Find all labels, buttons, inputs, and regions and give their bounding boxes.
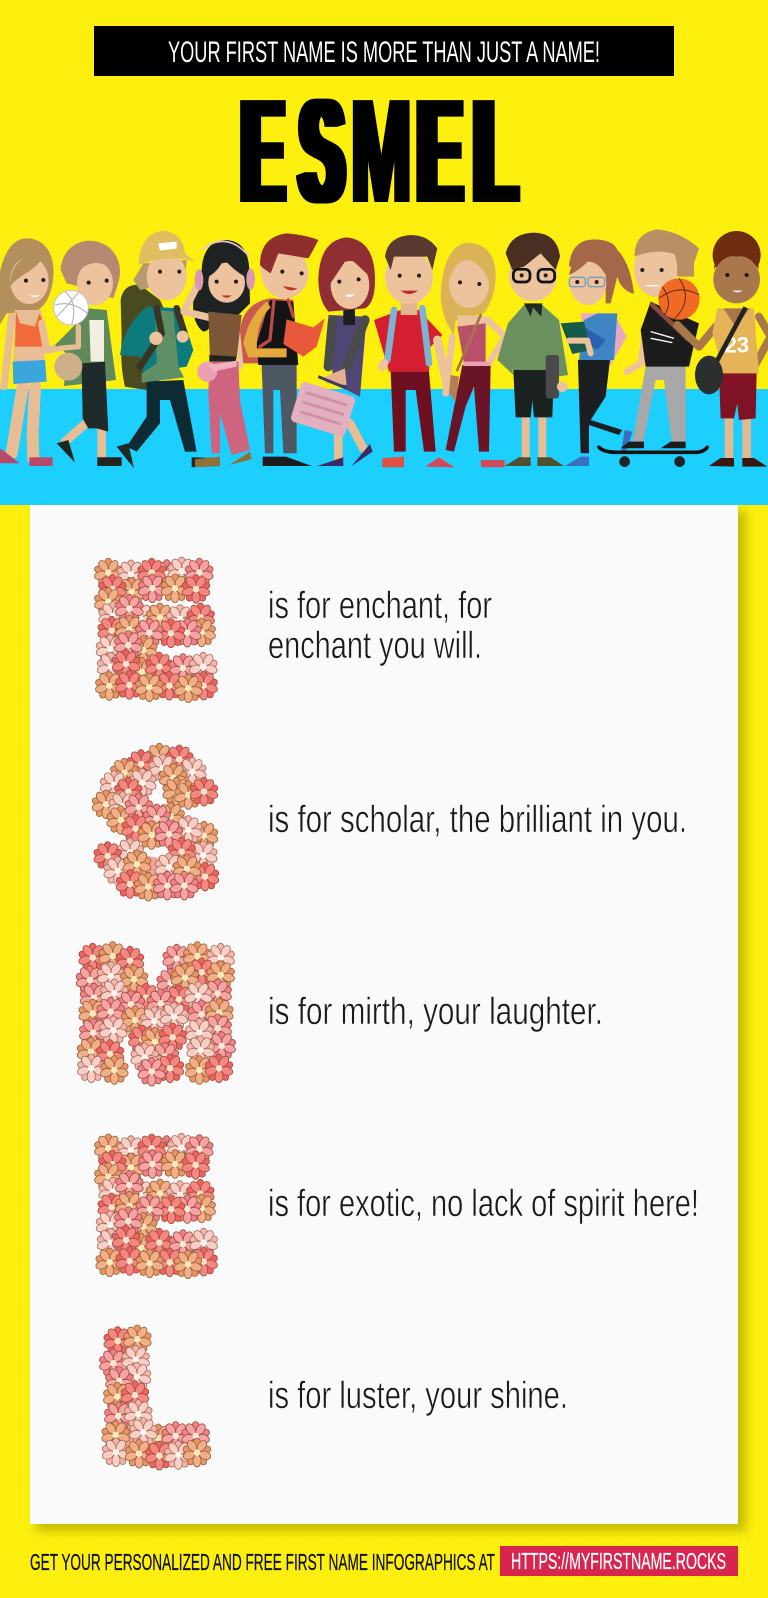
footer: call to action — [30, 1546, 738, 1576]
person: girl in orange top — [0, 238, 78, 466]
text: E line: is for enchant, for — [268, 585, 492, 627]
person: boy in yellow jersey with bag: 23 — [725, 333, 749, 358]
title: name: L — [474, 68, 516, 234]
letter L in flowers: L — [100, 1305, 200, 1491]
person: boy in red shirt with blue straps — [374, 235, 455, 467]
person: red-haired girl with pink case — [290, 237, 375, 466]
letter E in flowers: E — [102, 530, 208, 724]
person: girl in green jacket with volleyball — [54, 241, 122, 466]
letter M in flowers: M — [87, 922, 227, 1108]
person: girl with pink headphones — [184, 240, 255, 467]
panel shadow — [36, 511, 746, 1531]
letter E in flowers (second): E — [103, 1105, 210, 1299]
banner: tagline — [94, 26, 674, 76]
text: E line: enchant you will. — [268, 625, 482, 667]
illustration: group of twelve people — [0, 229, 768, 468]
letter S in flowers: S — [115, 728, 202, 907]
title: name: E — [418, 70, 461, 234]
text: M line: is for mirth, your laughter. — [268, 991, 603, 1033]
person: blonde girl with shoulder bag — [426, 243, 506, 467]
title: name — [242, 67, 516, 235]
blue floor band — [0, 389, 768, 505]
title: name: E — [242, 69, 283, 235]
panel: letters and meanings — [30, 505, 738, 1524]
person: girl with ponytail holding books — [561, 239, 634, 466]
person: boy in yellow jersey with bag — [677, 231, 768, 467]
text: L line: is for luster, your shine. — [268, 1375, 568, 1417]
person: boy with cap and large backpack — [117, 231, 220, 468]
person: boy with glasses in green sweater — [497, 233, 568, 466]
text: E line — [268, 585, 492, 667]
person: skateboarder with basketball — [599, 229, 707, 467]
title: name: S — [300, 70, 343, 234]
title: name: M — [351, 67, 411, 234]
person: boy reading a book — [240, 233, 325, 466]
